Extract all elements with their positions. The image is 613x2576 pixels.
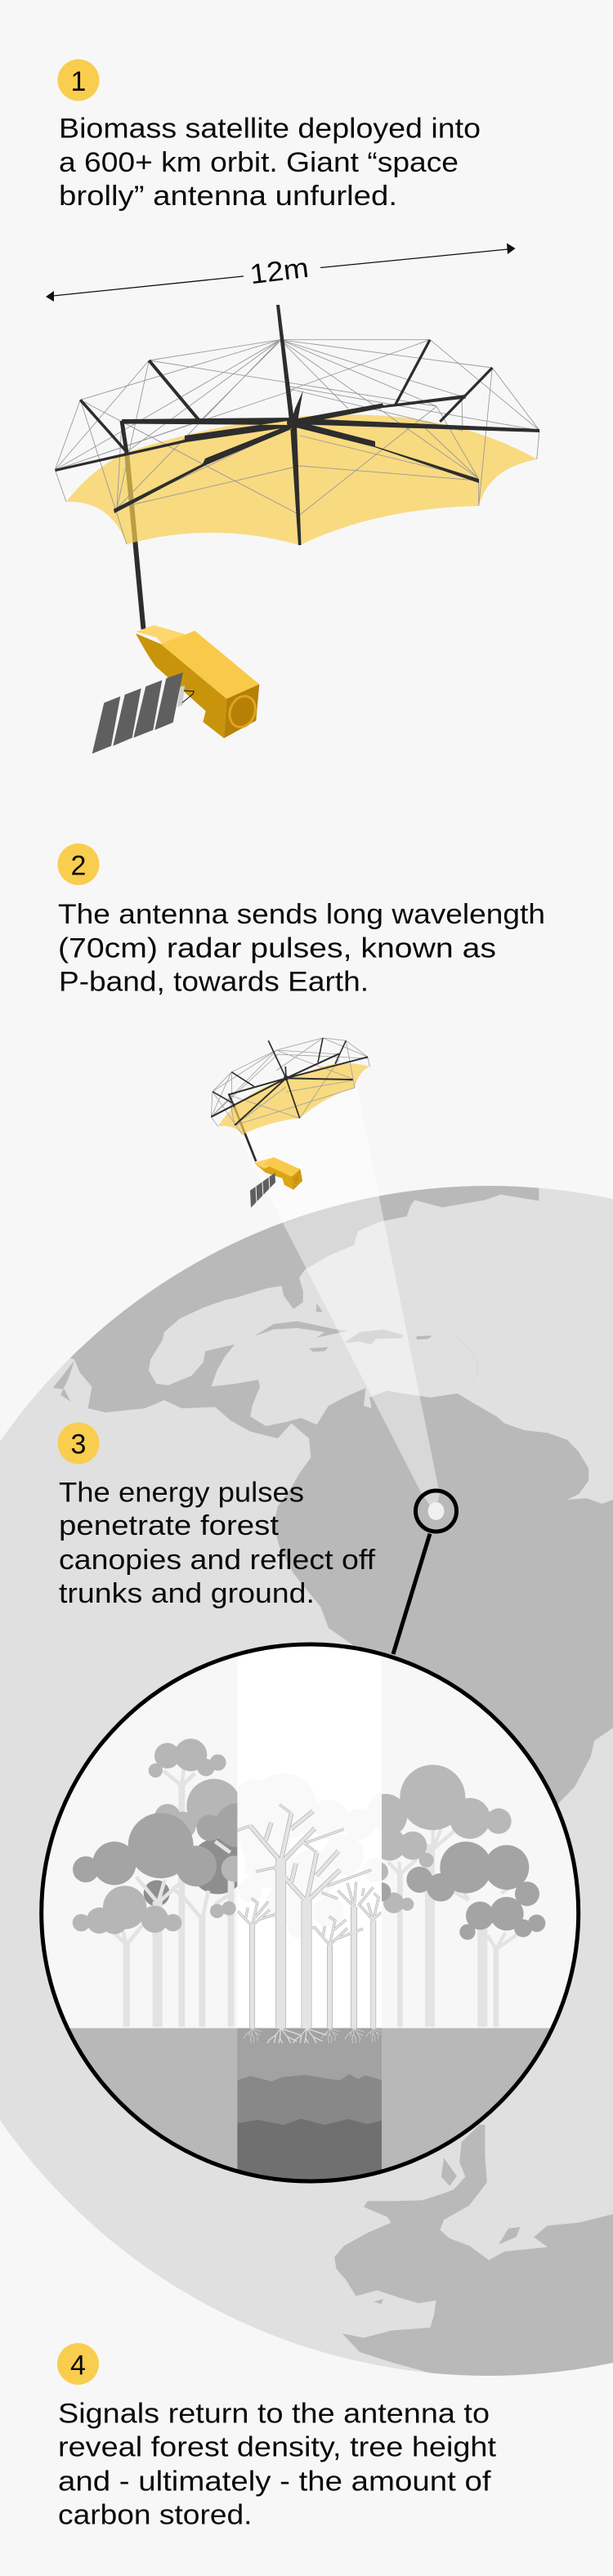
right trees [382, 1764, 546, 2027]
circle outline [42, 1644, 579, 2181]
text: step 2: The antenna sends long wavelength [58, 899, 545, 930]
land: the Americas [52, 1186, 613, 1805]
ribs [55, 305, 539, 545]
roots [244, 2028, 382, 2043]
badge 3: 3 [71, 1429, 86, 1460]
badge 4 [57, 2343, 99, 2385]
text: step 4: carbon stored. [58, 2500, 252, 2531]
small satellite [250, 1157, 302, 1208]
ribs [268, 1040, 300, 1118]
sky [33, 1635, 588, 2028]
wires [55, 340, 539, 544]
text: step 2: P-band, towards Earth. [59, 966, 369, 997]
magnifier: small ring and connector [393, 1491, 456, 1654]
ground layers [69, 2028, 550, 2179]
badge 2 [57, 843, 100, 885]
boom [124, 452, 145, 629]
text: step 3: The energy pulses [59, 1477, 304, 1508]
12m dimension arrow [46, 244, 516, 302]
wires [211, 1038, 369, 1134]
text: step 1: a 600+ km orbit. Giant “space [59, 147, 459, 178]
mesh reflector [218, 1063, 369, 1134]
text: step 3: canopies and reflect off [59, 1545, 376, 1576]
badge 1: 1 [71, 66, 86, 97]
text: step 4: Signals return to the antenna to [58, 2398, 490, 2429]
globe [0, 1171, 613, 2384]
forest cross-section circle [33, 1635, 588, 2203]
faded canopies in centre column [227, 1773, 407, 1938]
land: Patagonia and Antarctica [334, 2125, 613, 2384]
text: step 1: Biomass satellite deployed into [59, 113, 481, 144]
text: step 1 [59, 113, 481, 212]
text: step 3: penetrate forest [59, 1510, 280, 1541]
badge 4: 4 [70, 2350, 86, 2381]
text: step 4: and - ultimately - the amount of [58, 2466, 491, 2498]
radar beam [237, 1085, 445, 1520]
mesh reflector [66, 414, 537, 545]
left trees [72, 1738, 237, 2027]
text: step 3: trunks and ground. [59, 1578, 315, 1609]
text: step 1: brolly” antenna unfurled. [59, 181, 397, 212]
badge 2: 2 [71, 851, 86, 882]
12m dimension arrow: 12m [248, 253, 311, 290]
text: step 4 [58, 2398, 497, 2531]
struts [149, 360, 200, 422]
text: step 2: (70cm) radar pulses, known as [58, 933, 496, 964]
satellite [92, 625, 260, 754]
centre bare trees [237, 1805, 383, 2059]
text: step 4: reveal forest density, tree height [58, 2432, 497, 2463]
boom [232, 1103, 257, 1162]
small antenna [211, 1038, 369, 1208]
large antenna [55, 305, 539, 754]
text: step 3 [59, 1477, 376, 1609]
text: step 2 [58, 899, 545, 997]
badge 1 [57, 59, 100, 101]
badge 3 [57, 1422, 100, 1465]
